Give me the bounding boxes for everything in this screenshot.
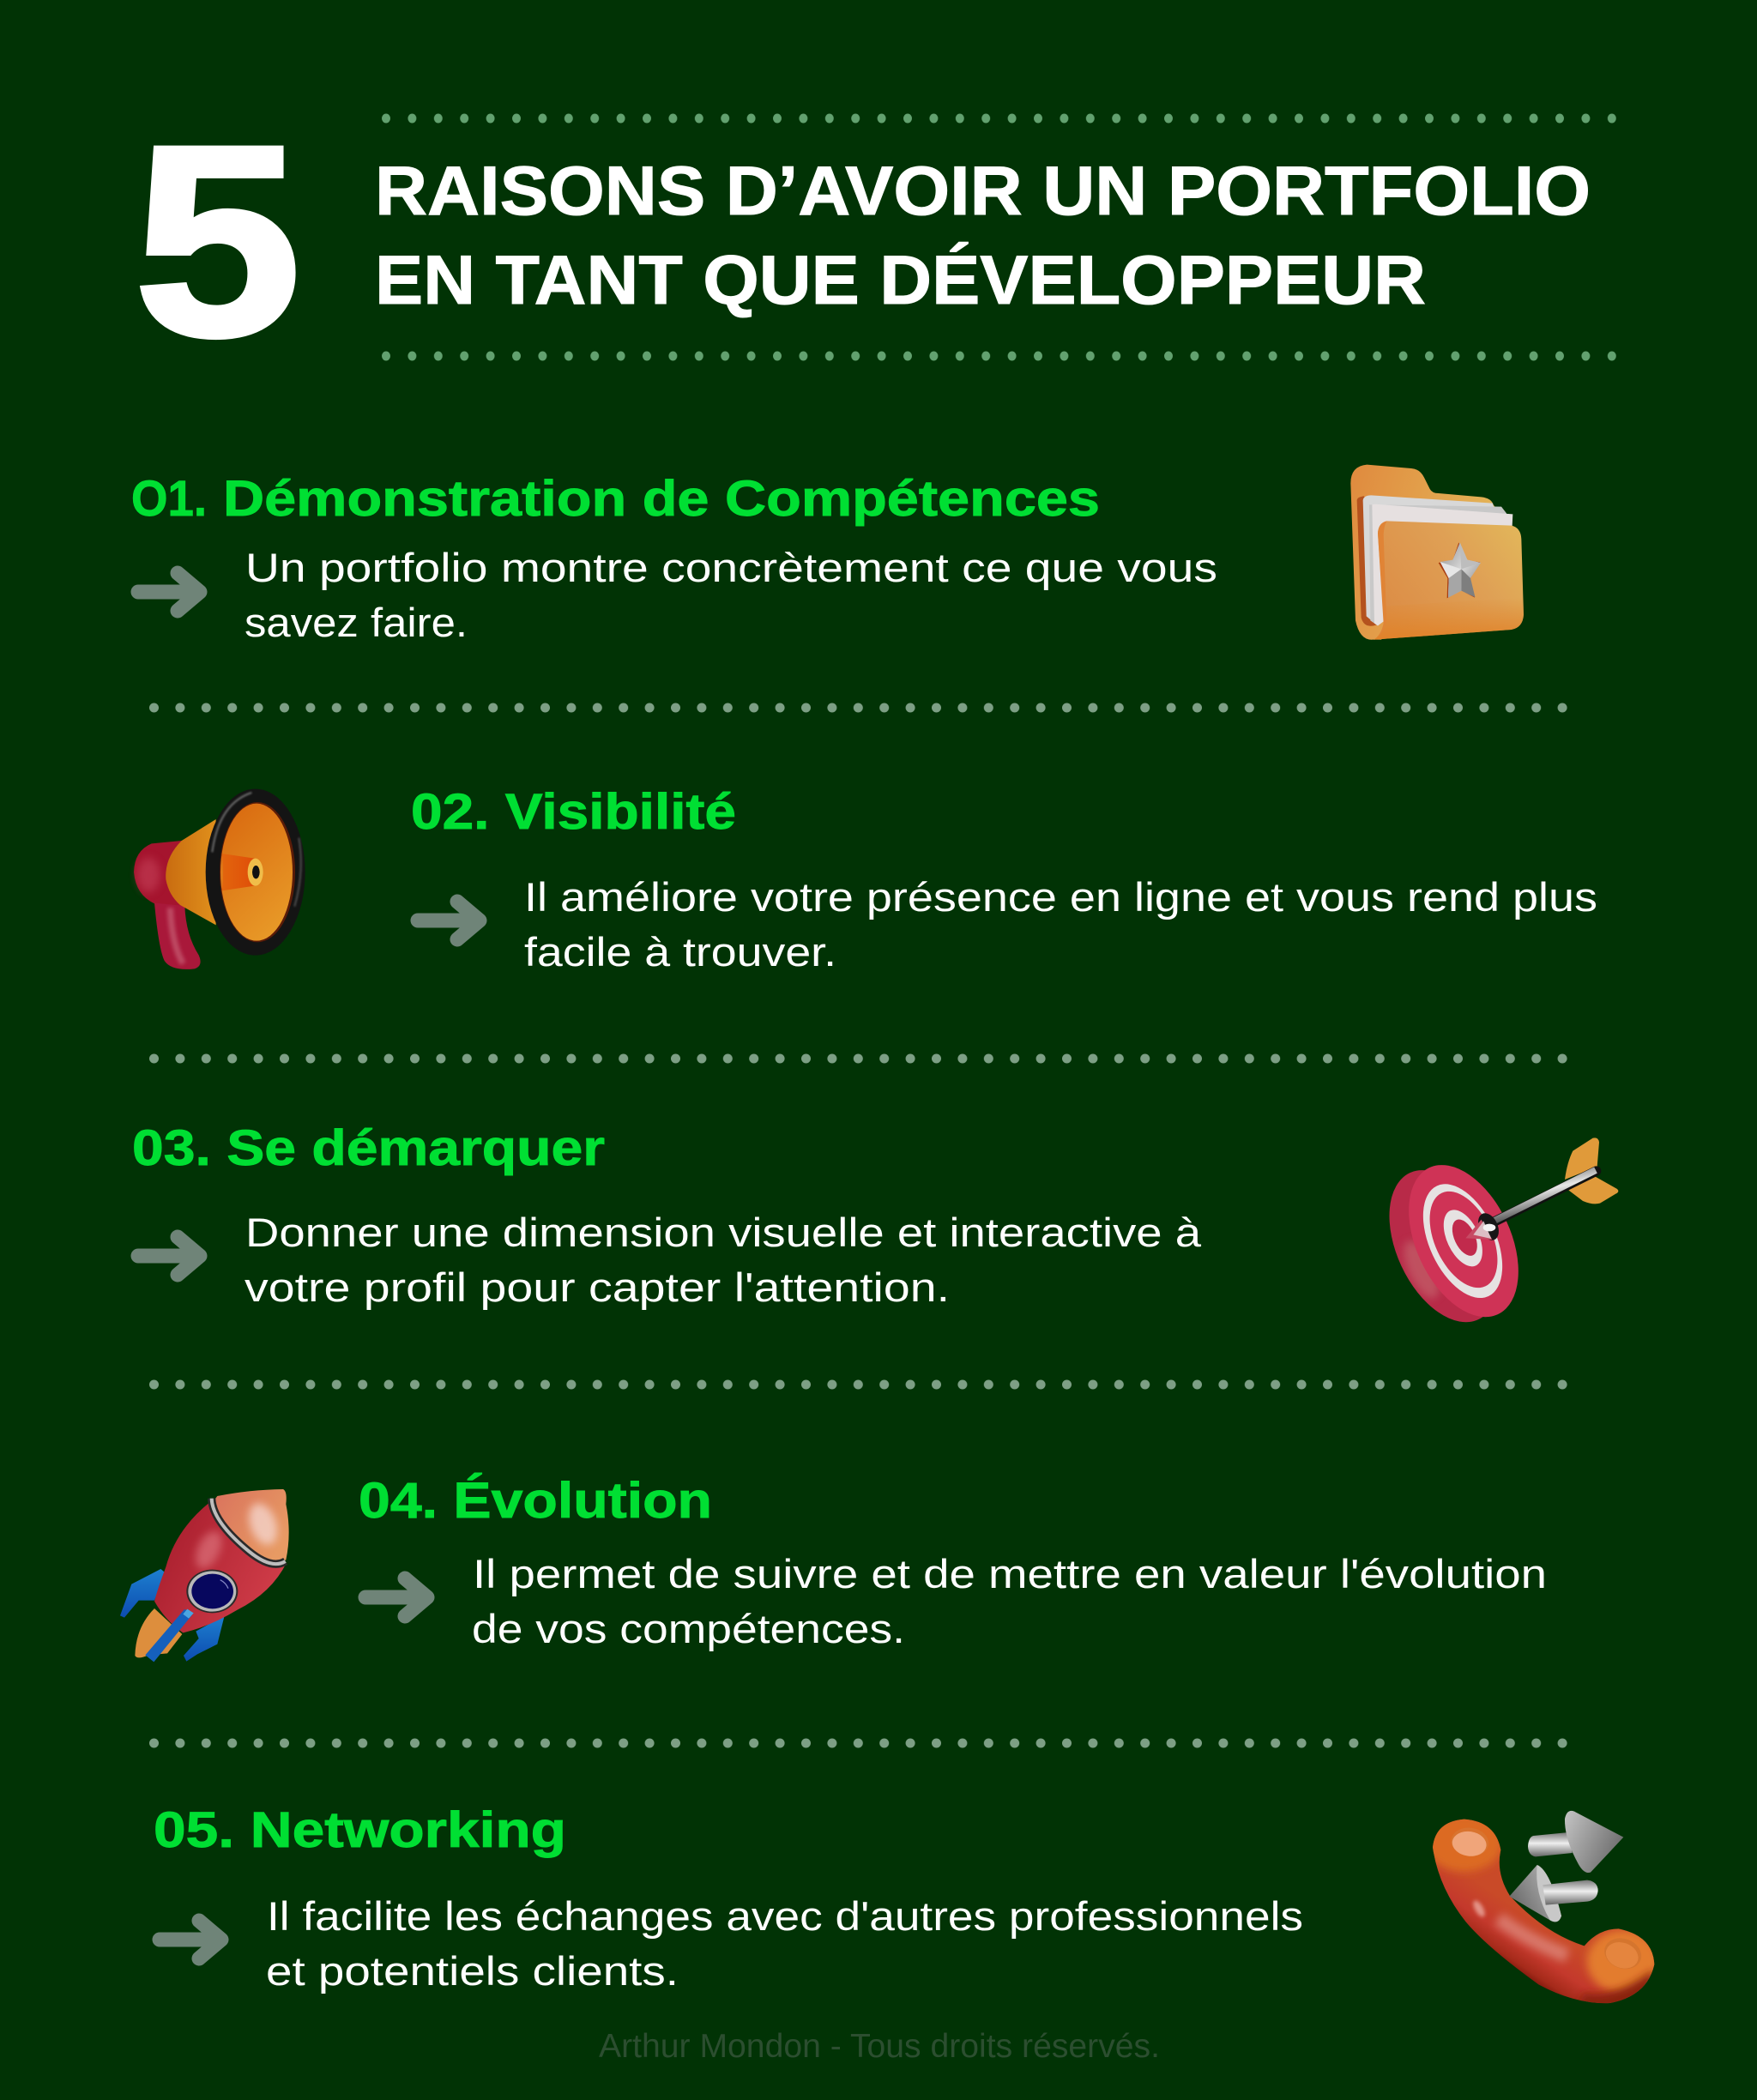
text 05: et potentiels clients. bbox=[266, 1948, 679, 1994]
text 02: facile à trouver. bbox=[524, 929, 836, 975]
arrow 05 bbox=[160, 1921, 221, 1958]
text 03: Donner une dimension visuelle et interactive à bbox=[245, 1210, 1202, 1255]
panel: reason 1 bbox=[131, 465, 1524, 645]
text 01: Un portfolio montre concrètement ce que vous bbox=[245, 545, 1217, 590]
panel: reason 5 bbox=[154, 1802, 1658, 2010]
text 05: Il facilite les échanges avec d'autres professionnels bbox=[267, 1893, 1303, 1939]
title bbox=[375, 153, 1591, 319]
icon: rocket bbox=[120, 1489, 289, 1662]
arrow 04 bbox=[365, 1578, 427, 1616]
heading 01: Démonstration de Compétences bbox=[223, 471, 1100, 527]
icon: phone with arrows bbox=[1426, 1811, 1658, 2010]
panel: reason 2 bbox=[134, 784, 1597, 975]
text 05 bbox=[266, 1893, 1303, 1994]
arrow 01 bbox=[138, 573, 200, 611]
heading 05: 05. Networking bbox=[154, 1802, 566, 1858]
footer credit: Arthur Mondon - Tous droits réservés. bbox=[599, 2028, 1160, 2065]
icon: folder with star bbox=[1350, 465, 1524, 640]
text 04: Il permet de suivre et de mettre en valeur l'évolution bbox=[473, 1551, 1547, 1596]
title: EN TANT QUE DÉVELOPPEUR bbox=[375, 241, 1426, 319]
heading 01: O1. bbox=[131, 471, 207, 527]
text 03: votre profil pour capter l'attention. bbox=[245, 1264, 950, 1310]
arrow 02 bbox=[418, 902, 480, 939]
heading 02: 02. Visibilité bbox=[411, 784, 736, 840]
panel: reason 4 bbox=[120, 1473, 1547, 1662]
text 02 bbox=[524, 874, 1597, 975]
text 04 bbox=[472, 1551, 1547, 1651]
heading 04: 04. Évolution bbox=[359, 1473, 712, 1529]
text 02: Il améliore votre présence en ligne et vous rend plus bbox=[524, 874, 1597, 920]
panel: reason 3 bbox=[130, 1127, 1618, 1323]
big number 5: 5 bbox=[134, 89, 301, 392]
text 01 bbox=[245, 545, 1217, 645]
text 01: savez faire. bbox=[245, 600, 468, 645]
arrow 03 bbox=[138, 1237, 200, 1275]
text 04: de vos compétences. bbox=[472, 1606, 905, 1651]
text 03 bbox=[245, 1210, 1202, 1310]
title: RAISONS D’AVOIR UN PORTFOLIO bbox=[375, 153, 1591, 230]
heading 03: 03. Se démarquer bbox=[132, 1120, 605, 1176]
icon: megaphone bbox=[134, 789, 305, 969]
icon: target with dart bbox=[1390, 1138, 1618, 1323]
